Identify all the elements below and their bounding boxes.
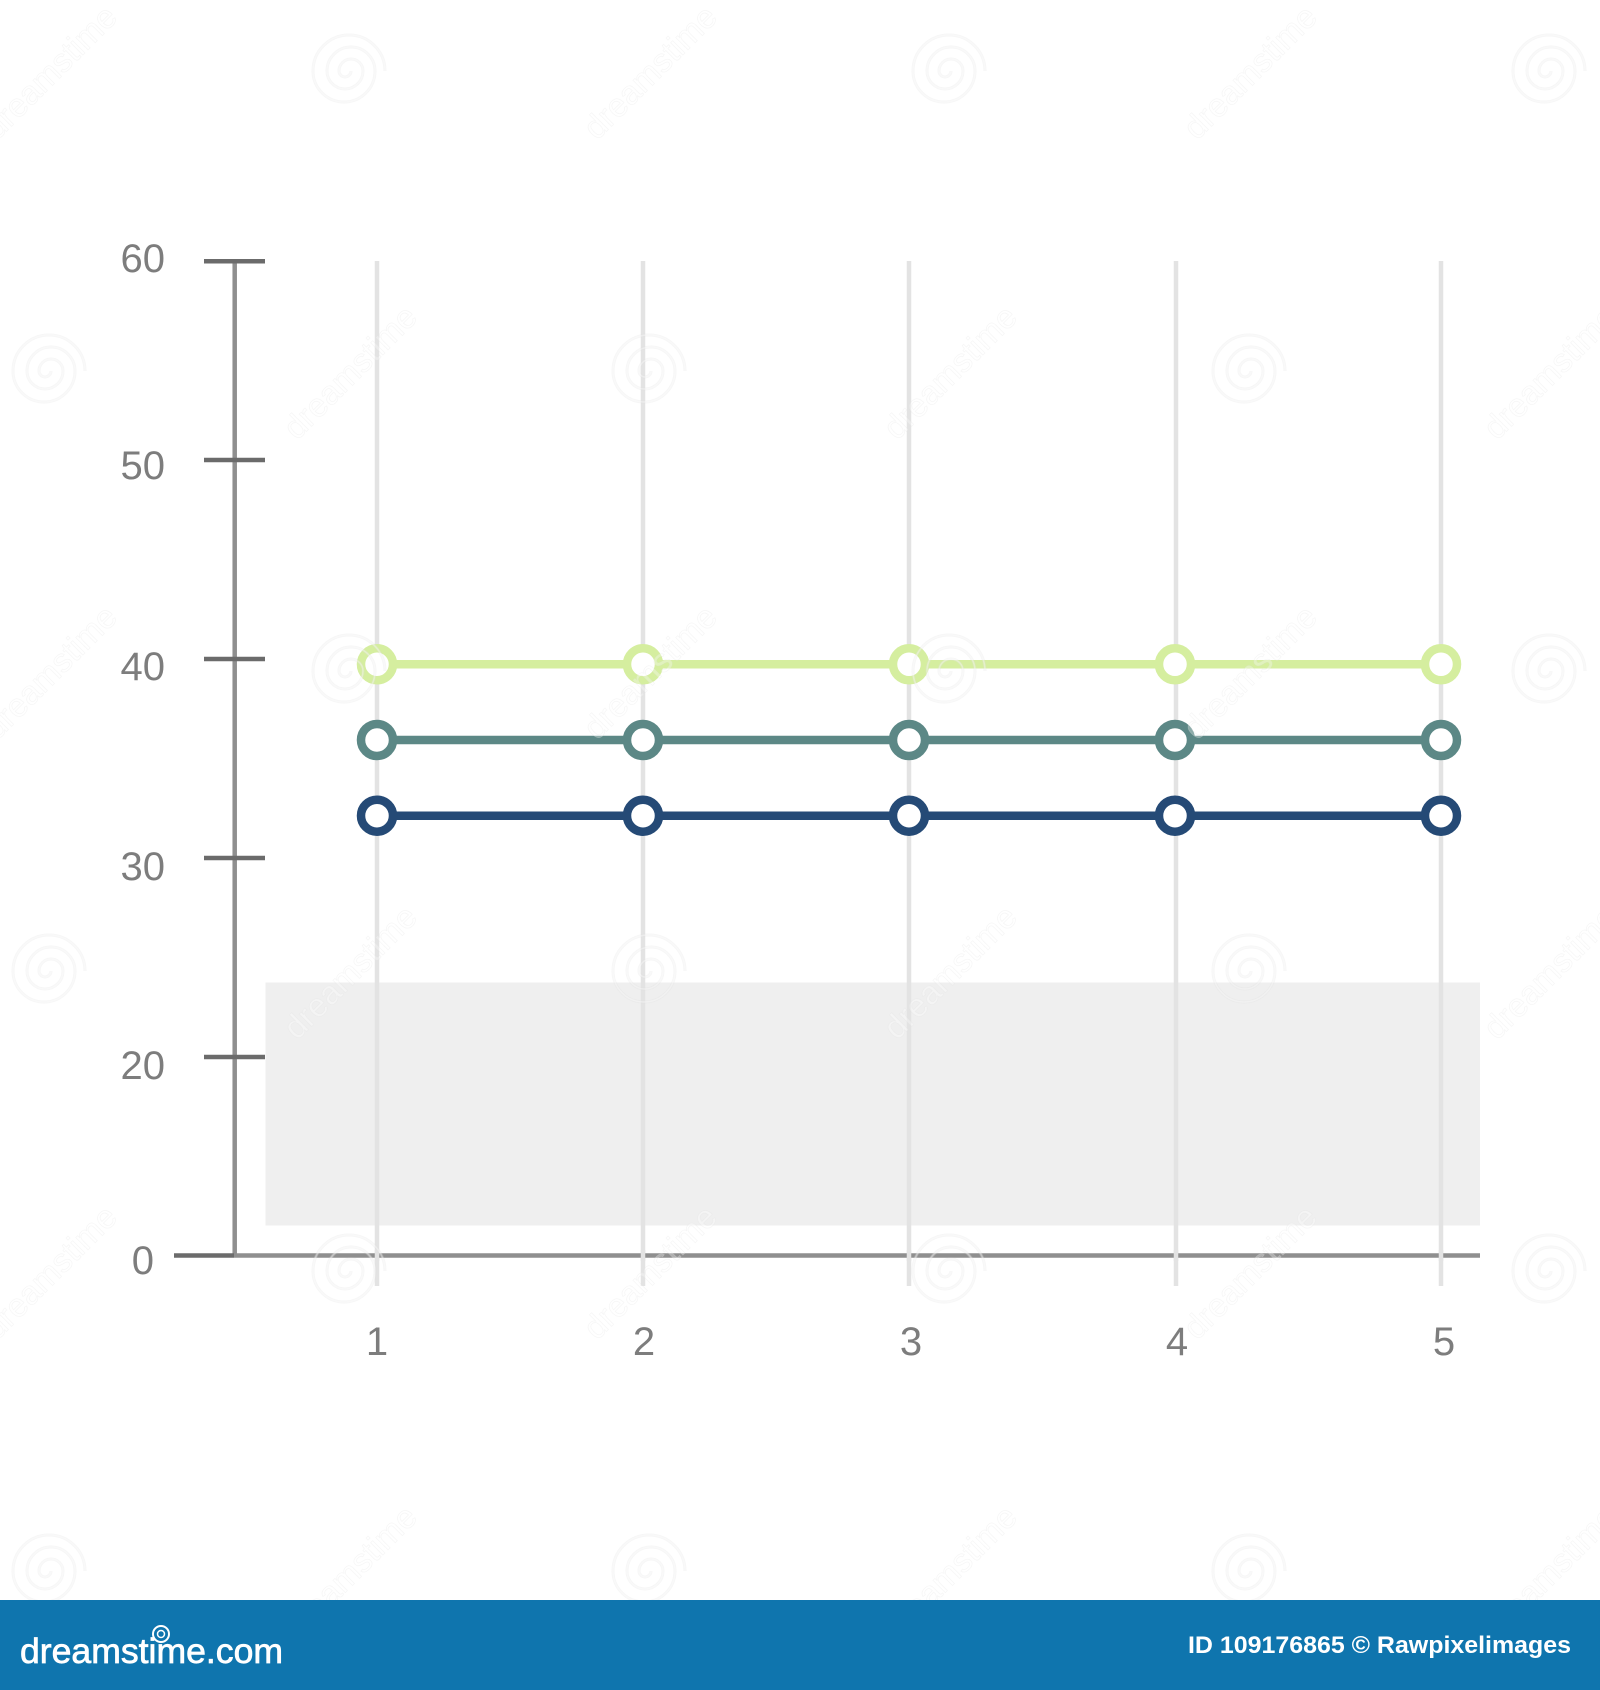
- y axis labels: 60: [120, 237, 165, 281]
- footer logo: dreamstime.com: [20, 1632, 283, 1671]
- vertical grid lines: [377, 261, 1441, 1286]
- y axis labels: 20: [120, 1044, 165, 1088]
- watermark text: dreamstime: [1176, 0, 1324, 146]
- watermark text: dreamstime: [576, 0, 724, 146]
- shaded band: [266, 982, 1480, 1226]
- x axis: [174, 1250, 1480, 1261]
- x axis labels: 1: [366, 1320, 388, 1364]
- y axis labels: 30: [120, 845, 165, 889]
- series: light green line: [361, 648, 1457, 680]
- series: navy line: [361, 800, 1457, 832]
- x axis labels: 2: [633, 1320, 655, 1364]
- watermark text: dreamstime: [876, 1498, 1024, 1646]
- y axis labels: [120, 237, 165, 1283]
- y axis labels: 0: [132, 1239, 154, 1283]
- watermark text: dreamstime: [276, 298, 424, 446]
- x axis labels: 4: [1166, 1320, 1188, 1364]
- watermark text: dreamstime: [576, 598, 724, 746]
- watermark text: dreamstime: [1176, 1198, 1324, 1346]
- watermark text: dreamstime: [876, 898, 1024, 1046]
- x axis labels: [366, 1320, 1455, 1364]
- y axis labels: 50: [120, 444, 165, 488]
- x axis labels: 3: [900, 1320, 922, 1364]
- footer bar: [0, 1600, 1600, 1690]
- x axis labels: 5: [1433, 1320, 1455, 1364]
- series: teal line: [361, 724, 1457, 756]
- watermark text: dreamstime: [1176, 598, 1324, 746]
- watermark text: dreamstime: [576, 1198, 724, 1346]
- watermark text: dreamstime: [876, 298, 1024, 446]
- watermark text: dreamstime: [276, 1498, 424, 1646]
- y axis labels: 40: [120, 645, 165, 689]
- footer image credit: ID 109176865 © Rawpixelimages: [1188, 1632, 1571, 1659]
- watermark text: dreamstime: [276, 898, 424, 1046]
- y axis with tick marks: [204, 261, 265, 1256]
